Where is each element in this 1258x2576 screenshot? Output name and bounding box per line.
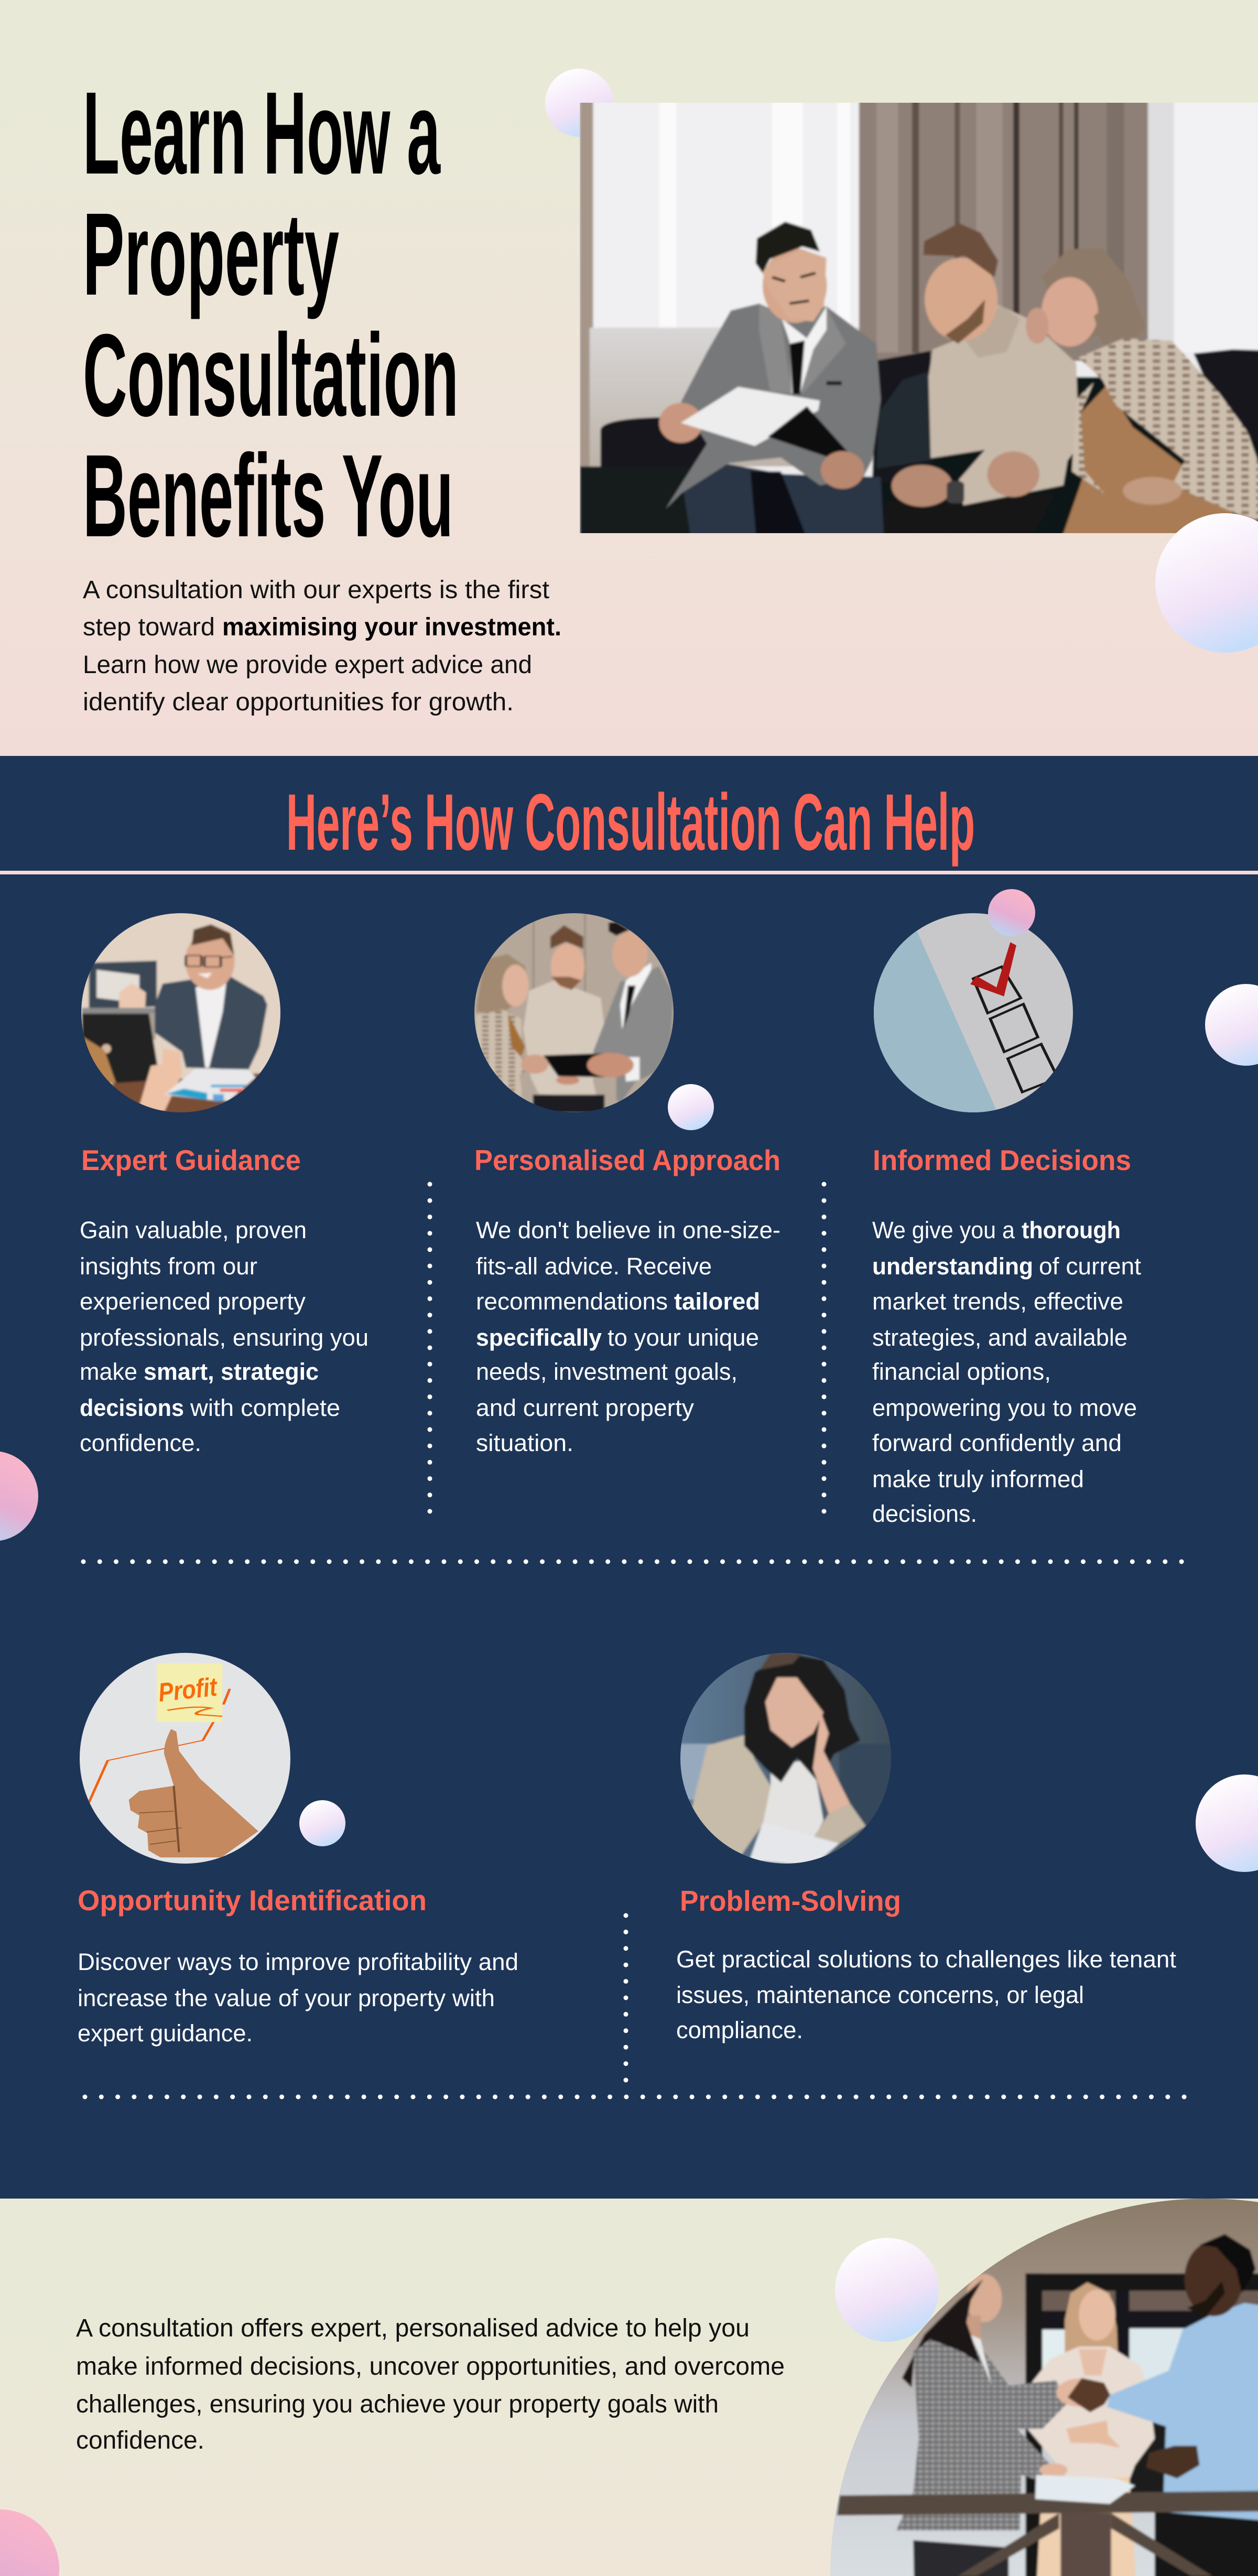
body: Informed Decisions: make truly informed bbox=[872, 1466, 1084, 1492]
heading: Opportunity Identification: Opportunity Identification bbox=[78, 1884, 427, 1917]
body: Informed Decisions bbox=[872, 1217, 1142, 1527]
decorative bubble behind hero photo bbox=[545, 69, 613, 137]
body: Problem-Solving: Get practical solutions to challenges like tenant bbox=[676, 1946, 1176, 1973]
body: Personalised Approach: specifically bbox=[476, 1324, 602, 1351]
title: Learn How a bbox=[83, 68, 441, 199]
body: Personalised Approach: recommendations bbox=[476, 1288, 668, 1315]
hero background bbox=[0, 0, 1258, 756]
body: Informed Decisions: market trends, effective bbox=[872, 1288, 1123, 1315]
body: Expert Guidance: decisions bbox=[80, 1394, 184, 1421]
body: Informed Decisions: forward confidently and bbox=[872, 1430, 1122, 1456]
closing paragraph bbox=[76, 2314, 785, 2454]
decorative pink bubble over photo 3 bbox=[988, 889, 1035, 936]
decorative bubble over hero photo bbox=[1155, 513, 1258, 653]
body: Expert Guidance: confidence. bbox=[80, 1430, 201, 1456]
decorative pink bubble left edge bbox=[0, 1451, 38, 1541]
benefit: Problem-Solving bbox=[676, 1885, 1176, 2043]
benefit: Personalised Approach bbox=[474, 1144, 780, 1456]
body: Informed Decisions: empowering you to move bbox=[872, 1394, 1137, 1421]
body: Personalised Approach bbox=[476, 1217, 780, 1456]
benefit: Expert Guidance bbox=[80, 1144, 368, 1456]
body: Expert Guidance: make bbox=[80, 1358, 137, 1385]
closing paragraph: make informed decisions, uncover opportunities, and overcome bbox=[76, 2353, 785, 2380]
heading: Personalised Approach: Personalised Approach bbox=[474, 1144, 780, 1176]
heading underline bbox=[0, 871, 1258, 874]
body: Personalised Approach: fits-all advice. Receive bbox=[476, 1253, 712, 1280]
footer background bbox=[0, 2199, 1258, 2576]
decorative pink bubble bottom left bbox=[0, 2509, 59, 2576]
body: Personalised Approach: to your unique bbox=[608, 1324, 759, 1351]
photo: Expert Guidance, smiling agent shaking hands bbox=[81, 913, 280, 1112]
title: Consultation bbox=[83, 310, 459, 441]
decorative bubble right edge bbox=[1205, 984, 1258, 1066]
body: Informed Decisions: We give you a bbox=[872, 1217, 1015, 1243]
body: Informed Decisions: understanding bbox=[872, 1253, 1033, 1280]
intro paragraph: identify clear opportunities for growth. bbox=[83, 688, 514, 716]
body: Expert Guidance: professionals, ensuring you bbox=[80, 1324, 368, 1351]
body: Personalised Approach: and current property bbox=[476, 1394, 694, 1421]
heading: Problem-Solving: Problem-Solving bbox=[680, 1885, 901, 1917]
body: Opportunity Identification: increase the value of your property with bbox=[78, 1985, 495, 2011]
body: Personalised Approach: situation. bbox=[476, 1430, 573, 1456]
title: Benefits You bbox=[83, 430, 453, 561]
intro paragraph: maximising your investment. bbox=[222, 613, 561, 641]
body: Personalised Approach: needs, investment goals, bbox=[476, 1358, 738, 1385]
body: Informed Decisions: thorough bbox=[1022, 1217, 1121, 1243]
body: Informed Decisions: decisions. bbox=[872, 1500, 977, 1527]
body: Opportunity Identification: Discover ways to improve profitability and bbox=[78, 1949, 518, 1975]
intro paragraph bbox=[83, 576, 561, 716]
title bbox=[83, 68, 459, 561]
photo: Opportunity Identification, thumbs-up with profit note bbox=[73, 1651, 295, 1866]
body: Personalised Approach: tailored bbox=[674, 1288, 760, 1315]
hero photo: consultant showing a document to a couple on a sofa bbox=[577, 100, 1258, 572]
body: Expert Guidance bbox=[80, 1217, 368, 1456]
heading: Informed Decisions: Informed Decisions bbox=[873, 1144, 1131, 1176]
closing paragraph: A consultation offers expert, personalised advice to help you bbox=[76, 2314, 750, 2342]
benefit: Opportunity Identification bbox=[78, 1884, 518, 2047]
photo: agent shaking hands with clients on a porch bbox=[818, 2196, 1258, 2576]
body: Expert Guidance: smart, strategic bbox=[144, 1358, 319, 1385]
body: Informed Decisions: financial options, bbox=[872, 1358, 1051, 1385]
photo: Informed Decisions, checklist with red tick bbox=[874, 913, 1073, 1112]
body: Problem-Solving bbox=[676, 1946, 1176, 2043]
decorative bubble in footer bbox=[835, 2238, 939, 2342]
body: Expert Guidance: Gain valuable, proven bbox=[80, 1217, 307, 1243]
body: Expert Guidance: with complete bbox=[190, 1394, 340, 1421]
body: Problem-Solving: compliance. bbox=[676, 2017, 803, 2043]
body: Informed Decisions: of current bbox=[1039, 1253, 1142, 1280]
intro paragraph: step toward bbox=[83, 613, 215, 641]
title: Property bbox=[83, 189, 339, 320]
decorative bubble right edge lower bbox=[1196, 1774, 1258, 1872]
intro paragraph: Learn how we provide expert advice and bbox=[83, 651, 532, 679]
body: Expert Guidance: experienced property bbox=[80, 1288, 306, 1315]
body: Expert Guidance: insights from our bbox=[80, 1253, 257, 1280]
body: Personalised Approach: We don't believe in one-size- bbox=[476, 1217, 780, 1243]
decorative bubble beside photo 2 bbox=[668, 1084, 714, 1130]
body: Informed Decisions: strategies, and available bbox=[872, 1324, 1127, 1351]
closing paragraph: confidence. bbox=[76, 2427, 204, 2454]
benefit: Informed Decisions bbox=[872, 1144, 1142, 1527]
intro paragraph: A consultation with our experts is the first bbox=[83, 576, 549, 604]
body: Problem-Solving: issues, maintenance concerns, or legal bbox=[676, 1982, 1084, 2008]
body: Opportunity Identification: expert guidance. bbox=[78, 2020, 253, 2047]
heading: Expert Guidance: Expert Guidance bbox=[81, 1144, 301, 1176]
note text: Profit: Profit bbox=[157, 1672, 220, 1707]
decorative bubble beside photo 4 bbox=[299, 1800, 345, 1846]
closing paragraph: challenges, ensuring you achieve your property goals with bbox=[76, 2390, 719, 2418]
navy main panel bbox=[0, 756, 1258, 2199]
body: Opportunity Identification bbox=[78, 1949, 518, 2047]
photo: Problem-Solving, worried woman reading papers bbox=[670, 1651, 897, 1866]
photo: Personalised Approach, three people reviewing a clipboard bbox=[474, 913, 674, 1112]
